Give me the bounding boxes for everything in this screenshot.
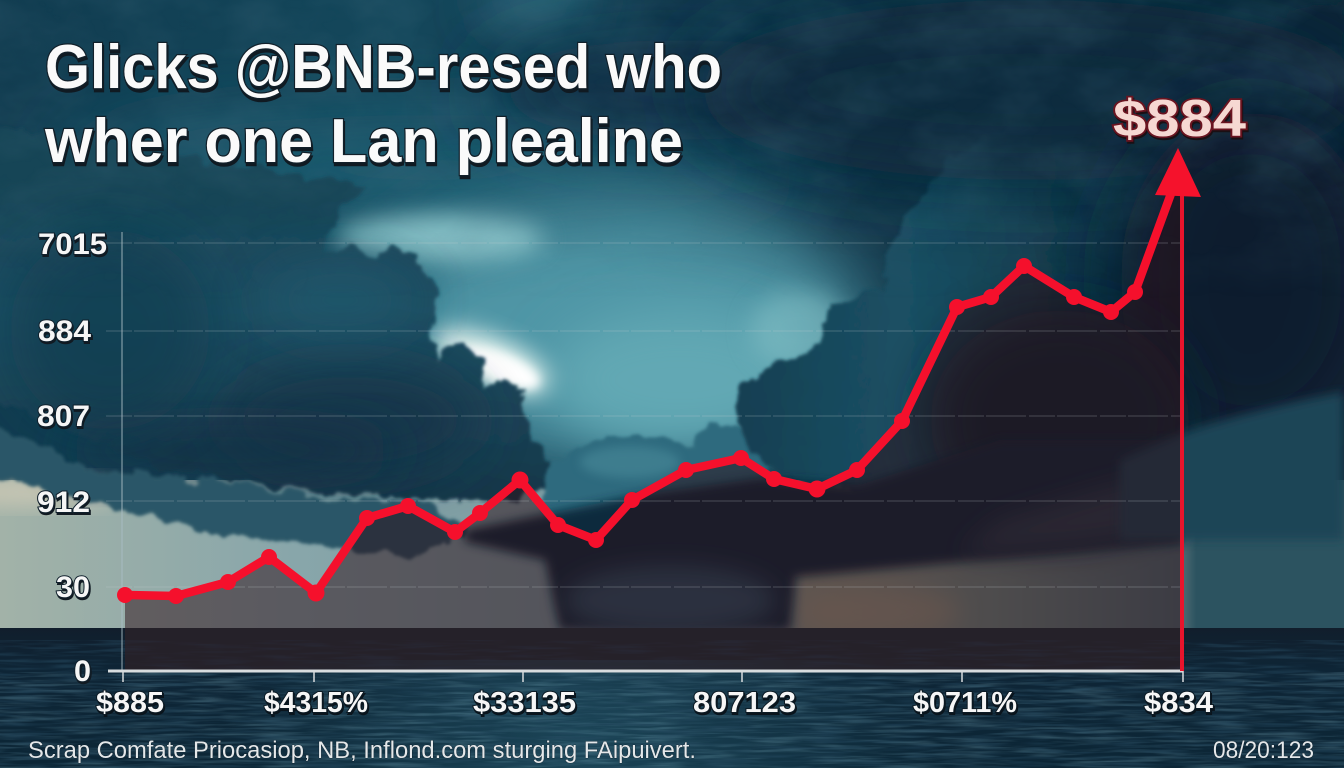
lower horizon haze [0,480,1344,630]
y axis labels: 912 [37,486,90,519]
area fill under the red line [125,170,1180,670]
arrow shaft [1180,190,1184,671]
line [125,180,1176,596]
date stamp: 08/20:123 [1213,737,1314,764]
peak value callout: $884 [1113,90,1246,148]
y axis labels: 0 [74,655,91,688]
y axis labels: 30 [56,571,90,604]
y axis labels: 884 [38,315,91,348]
arrow head [1155,148,1201,197]
x axis with ticks [108,671,1183,682]
horizontal grid lines [106,243,1180,587]
background: dark squall band [465,392,1344,634]
title: Glicks @BNB-resed who [45,33,722,102]
x axis labels: 807123 [693,687,796,719]
x axis labels: $885 [96,687,164,719]
background: left cumulus cloud [0,120,552,556]
red price line chart [117,180,1182,671]
background: centre low cloud [540,424,780,540]
x axis labels [96,687,1213,719]
background: dark upper-right storm mass [0,0,1344,456]
background: dark sea [0,628,1344,768]
y axis labels: 7015 [38,228,107,261]
source footnote: Scrap Comfate Priocasiop, NB, Inflond.com sturging FAipuivert. [28,737,696,764]
title: wher one Lan plealine [44,107,683,176]
x axis labels: $33135 [473,687,576,719]
low band cloud [0,418,470,556]
y axis labels [37,228,107,688]
x axis labels: $0711% [913,687,1017,719]
y axis line [121,232,123,670]
title [44,33,722,176]
y axis labels: 807 [37,400,90,433]
x axis labels: $834 [1144,687,1213,719]
x axis labels: $4315% [264,687,368,719]
background: right cumulus cloud [736,0,1344,520]
data points [117,258,1143,604]
